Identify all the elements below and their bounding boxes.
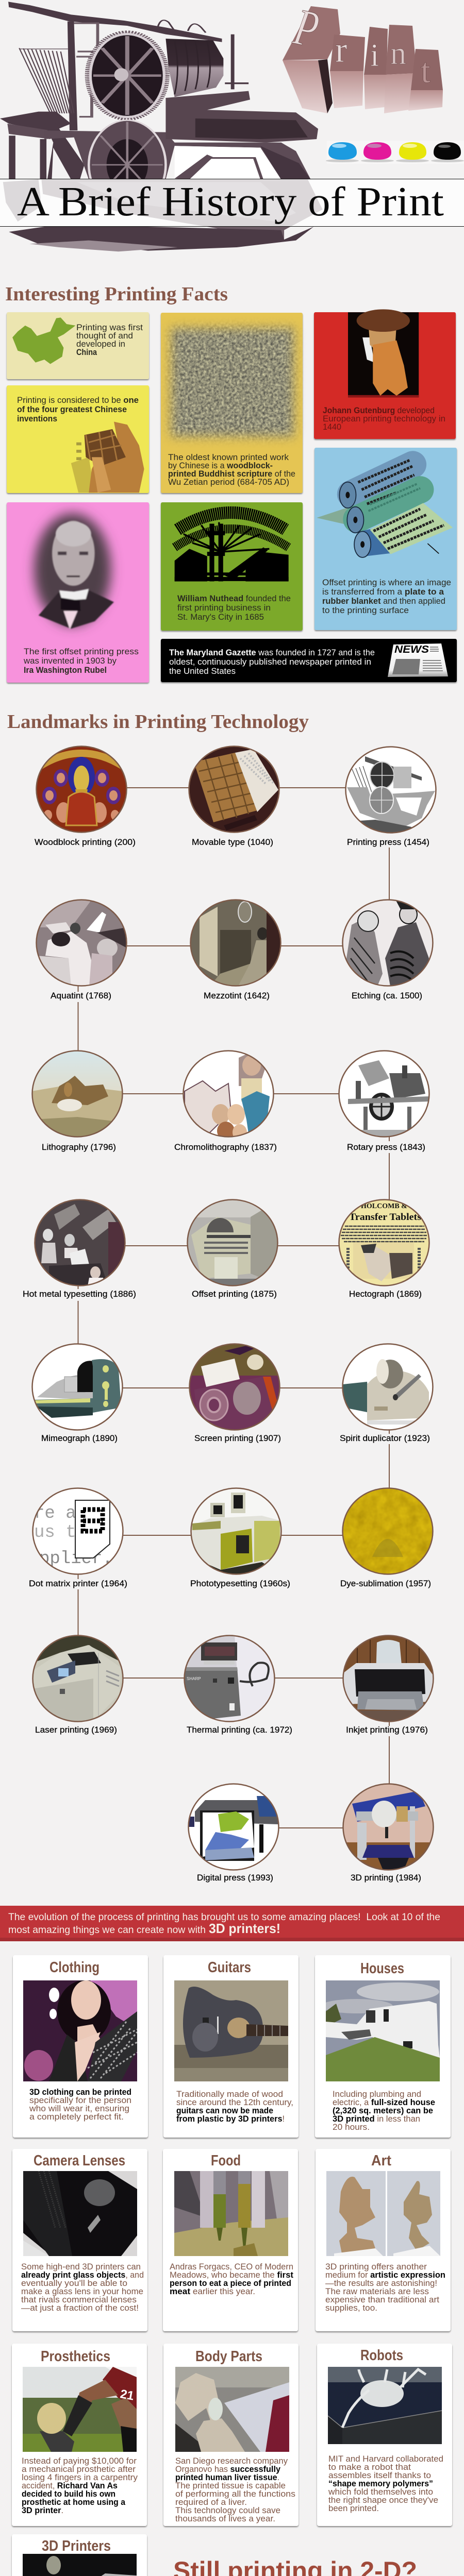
icon: newspaper [388, 643, 448, 677]
panel: Johann Gutenburg [314, 309, 456, 439]
label: Chromolithography (1837) [174, 1142, 277, 1152]
fact text: oldest, continuously published newspaper printed in [169, 657, 371, 667]
card: Guitars [163, 1955, 299, 2138]
image: portrait of Rubel [34, 513, 114, 629]
node: Printing press [345, 747, 436, 847]
node: Aquatint [36, 900, 127, 1001]
label: Etching (ca. 1500) [352, 991, 422, 1001]
node: Dot matrix printer: pplier. [39, 1549, 113, 1569]
label: Dot matrix printer (1964) [29, 1579, 127, 1588]
card text: since around the 12th century, [176, 2097, 293, 2107]
label: Woodblock printing (200) [35, 837, 136, 847]
card text: supplies, too. [325, 2303, 377, 2313]
image: white robot [328, 2367, 442, 2444]
card text: required of a liver. [175, 2497, 247, 2507]
image: PRINT metal type blocks: n [390, 36, 406, 71]
card text: San Diego research company [175, 2456, 288, 2466]
fact text: the United States [169, 666, 236, 676]
image: Buddhist scripture print [171, 328, 294, 437]
card text [325, 2262, 445, 2313]
banner: 3D printers intro [0, 1906, 464, 1941]
node: Spirit duplicator [340, 1344, 433, 1443]
card text: a mechanical prosthetic after [22, 2464, 136, 2474]
card text: eventually you'll be able to [21, 2278, 127, 2288]
card title: Body Parts [195, 2348, 262, 2365]
card text: prosthetic at home using a [22, 2497, 126, 2507]
panel: William Nuthead [161, 502, 303, 631]
node: Mimeograph [32, 1344, 123, 1443]
card text: printed human liver tissue. [175, 2472, 279, 2482]
fact text: to the printing surface [322, 605, 409, 615]
node: Laser printing [32, 1635, 123, 1735]
image: PRINT metal type blocks [283, 0, 443, 113]
card text: medium for artistic expression [325, 2270, 445, 2280]
fact text: Johann Gutenburg developed [323, 405, 435, 415]
card text: assembles itself thanks to [328, 2470, 431, 2480]
card: Robots [317, 2344, 452, 2526]
fact text: thought of and [76, 331, 133, 341]
node: Rotary press [339, 1050, 429, 1152]
card text: been printed. [328, 2503, 379, 2513]
image: printed guitar [174, 1980, 288, 2081]
image: prosthetic leg: 21 [119, 2387, 135, 2403]
fact text: first printing business in [177, 603, 271, 613]
card: Clothing [13, 1955, 148, 2138]
card text: The printed tissue is capable [175, 2481, 286, 2490]
fact text: was invented in 1903 by [23, 656, 117, 666]
card text [21, 2262, 144, 2313]
image: PRINT metal type blocks: r [335, 30, 347, 70]
card: Houses [315, 1955, 451, 2138]
fact text: Ira Washington Rubel [24, 665, 107, 675]
node: Dot matrix printer: us t [34, 1523, 76, 1543]
image: PRINT metal type blocks: i [370, 38, 379, 73]
node: Hectograph [339, 1199, 429, 1299]
node: Etching [342, 900, 433, 1001]
label: Inkjet printing (1976) [346, 1725, 428, 1735]
heading: Interesting Printing Facts: Interesting Printing Facts [5, 283, 228, 305]
label: Phototypesetting (1960s) [190, 1579, 290, 1588]
panel: China fact [7, 312, 149, 379]
card text: electric, a full-sized house [333, 2097, 435, 2107]
card title: Robots [360, 2347, 403, 2364]
label: 3D printing (1984) [351, 1873, 421, 1883]
fact text: by Chinese is a woodblock- [168, 461, 273, 470]
image: printed dress [23, 1980, 137, 2081]
fact text [177, 594, 291, 622]
fact text: China [76, 347, 97, 357]
node: Dot matrix printer [29, 1488, 127, 1588]
fact text [169, 648, 375, 676]
header illustration: printing press [0, 2, 323, 251]
card text: the right shape once they've [328, 2495, 438, 2505]
image: PRINT metal type blocks: t [421, 51, 430, 90]
node: Screen printing [189, 1344, 281, 1443]
card title: 3D Printers [42, 2538, 111, 2554]
node: Offset printing [187, 1199, 278, 1299]
image: RepRap printer [23, 2554, 137, 2576]
label: Mezzotint (1642) [204, 991, 270, 1001]
panel: oldest printed work [161, 313, 303, 493]
label: Aquatint (1768) [51, 991, 111, 1001]
fact text: Printing was first [76, 323, 143, 332]
label: Printing press (1454) [347, 837, 429, 847]
node: Hectograph: HOLCOMB & CO. [361, 1202, 422, 1210]
panel: offset printing [314, 448, 457, 630]
card text: accident, Richard Van As [22, 2481, 118, 2490]
card text: which fold themselves into [328, 2487, 433, 2497]
fact text: European printing technology in [323, 414, 445, 423]
card: Art [316, 2149, 451, 2331]
card text [176, 2089, 293, 2124]
card text: make a glass lens in your home [21, 2286, 143, 2296]
card: Prosthetics [12, 2344, 147, 2526]
card text: Some high-end 3D printers can [21, 2262, 141, 2272]
label: Screen printing (1907) [194, 1433, 281, 1443]
node: 3D printing [343, 1784, 434, 1883]
fact text: Offset printing is where an image [322, 578, 451, 587]
image: gloved hands with tissue [175, 2367, 289, 2452]
title banner [0, 179, 464, 227]
card text: 3D clothing can be printed [29, 2087, 131, 2097]
fact text: of the four greatest Chinese [17, 404, 127, 414]
card text [170, 2262, 293, 2296]
fact text: developed in [76, 339, 125, 349]
icon: newspaper: NEWS [394, 644, 429, 655]
heading: Landmarks in Printing Technology: Landmarks in Printing Technology [7, 711, 309, 733]
card: 3D Printers [12, 2534, 147, 2576]
node: Dot matrix printer: re a [34, 1504, 76, 1523]
card text: meat earlier this year. [170, 2286, 255, 2296]
card text: expensive than traditional art [325, 2295, 439, 2304]
label: Rotary press (1843) [347, 1142, 425, 1152]
node: Dye-sublimation [340, 1488, 433, 1588]
image: printed house [326, 1980, 440, 2081]
fact text [322, 578, 451, 615]
node: Thermal printing [184, 1635, 292, 1735]
image: hand holding type block [71, 421, 144, 493]
fact text: William Nuthead founded the [177, 594, 291, 603]
fact text [76, 323, 143, 357]
card: Camera Lenses [12, 2149, 147, 2331]
label: Lithography (1796) [42, 1142, 116, 1152]
card text: Organovo has successfully [175, 2464, 281, 2474]
node: Chromolithography [174, 1050, 277, 1152]
image: food printer [174, 2171, 288, 2256]
card title: Houses [360, 1960, 404, 1977]
fact text [323, 405, 445, 432]
card text: guitars can now be made [176, 2106, 273, 2115]
label: Dye-sublimation (1957) [340, 1579, 431, 1588]
fact text: The oldest known printed work [168, 452, 289, 462]
card text: MIT and Harvard collaborated [328, 2454, 443, 2464]
label: Hot metal typesetting (1886) [23, 1289, 136, 1299]
card text [22, 2456, 138, 2515]
card text: 20 hours. [333, 2122, 370, 2132]
fact text: Printing is considered to be one [17, 395, 139, 405]
image: printed sculpture [326, 2171, 440, 2256]
image: engraving of a press [175, 513, 289, 581]
card text: 3D printed in less than [333, 2114, 420, 2124]
node: Hectograph: Transfer Tablets [349, 1212, 421, 1223]
card title: Food [211, 2153, 241, 2169]
card text: of performing all the functions [175, 2489, 295, 2499]
card text [175, 2456, 295, 2523]
card text: decided to build his own [22, 2489, 115, 2499]
panel: four greatest inventions [7, 385, 149, 493]
card text [333, 2089, 435, 2132]
fact text: rubber blanket and then applied [322, 596, 445, 606]
card text: a completely perfect fit. [29, 2112, 124, 2122]
label: Laser printing (1969) [35, 1725, 117, 1735]
image: portrait of Gutenburg [348, 309, 419, 397]
card text: —at just a fraction of the cost! [21, 2303, 139, 2313]
card title: Prosthetics [41, 2348, 110, 2365]
node: Movable type [189, 746, 279, 847]
node: Hot metal typesetting [23, 1199, 136, 1299]
banner: 3D printers intro: most amazing things we can create now with [8, 1925, 206, 1936]
card title: Guitars [208, 1959, 251, 1976]
panel: Ira Washington Rubel [7, 502, 149, 683]
card: Food [163, 2149, 298, 2331]
fact text: St. Mary's City in 1685 [177, 612, 264, 622]
card text [328, 2454, 443, 2513]
node: Phototypesetting [190, 1488, 290, 1588]
fact text: printed Buddhist scripture of the [168, 469, 295, 479]
fact text: The first offset printing press [24, 647, 139, 656]
card text: This technology could save [175, 2505, 280, 2515]
card text: Andras Forgacs, CEO of Modern [170, 2262, 293, 2272]
card title: Clothing [49, 1959, 100, 1976]
card text: who will wear it, ensuring [29, 2104, 129, 2113]
label: Spirit duplicator (1923) [340, 1433, 430, 1443]
fact text: inventions [17, 414, 57, 423]
card text: Instead of paying $10,000 for [22, 2456, 137, 2466]
card text: Meadows, who became the first [170, 2270, 293, 2280]
label: Digital press (1993) [197, 1873, 273, 1883]
card title: Camera Lenses [34, 2153, 125, 2169]
card text: thousands of lives a year. [175, 2514, 275, 2523]
card text: (2,320 sq. meters) can be [333, 2106, 433, 2115]
card text: The raw materials are less [325, 2286, 429, 2296]
title: A Brief History of Print [17, 179, 444, 225]
card text: “shape memory polymers” [328, 2479, 433, 2488]
panel: Maryland Gazette [161, 639, 457, 682]
fact text [168, 452, 295, 487]
icon: CMYK ink drops [326, 141, 464, 164]
card: Body Parts [163, 2344, 299, 2526]
card text: 3D printer. [22, 2505, 63, 2515]
card text: losing 4 fingers in a carpentry [22, 2472, 138, 2482]
card text: Traditionally made of wood [176, 2089, 283, 2099]
fact text: The Maryland Gazette was founded in 1727 and is the [169, 648, 375, 657]
label: Offset printing (1875) [192, 1289, 277, 1299]
card text: —the results are astonishing! [325, 2278, 437, 2288]
fact text: Wu Zetian period (684-705 AD) [168, 477, 289, 487]
label: Movable type (1040) [192, 837, 273, 847]
node: Lithography [32, 1050, 123, 1152]
image: prosthetic leg [23, 2367, 137, 2452]
banner: 3D printers intro: 3D printers! [209, 1921, 280, 1936]
fact text: 1440 [323, 422, 341, 432]
banner text: The evolution of the process of printing has brought us to some amazing places! Look at 10 of the [8, 1912, 440, 1923]
fact text [23, 647, 139, 675]
timeline connectors [78, 788, 389, 1828]
node: Woodblock printing [35, 746, 136, 847]
label: Hectograph (1869) [349, 1289, 422, 1299]
card text: 3D printing offers another [325, 2262, 427, 2272]
node: Mezzotint [190, 900, 282, 1001]
card text: from plastic by 3D printers! [176, 2114, 285, 2124]
card text: to make a robot that [328, 2462, 411, 2472]
card title: Art [371, 2153, 391, 2169]
node: Thermal printing: SHARP [187, 1676, 201, 1681]
node: Inkjet printing [343, 1635, 434, 1735]
node: Digital press [188, 1784, 279, 1883]
icon: map of China [12, 317, 75, 364]
image: offset printing rollers [317, 460, 453, 557]
label: Mimeograph (1890) [41, 1433, 118, 1443]
card text: specifically for the person [29, 2095, 131, 2105]
fact text: is transferred from a plate to a [322, 587, 444, 597]
card text: already print glass objects, and [21, 2270, 144, 2280]
card text: Including plumbing and [333, 2089, 421, 2099]
fact text [17, 395, 139, 423]
image: printed lens [23, 2171, 137, 2256]
card text [29, 2087, 131, 2122]
label: Thermal printing (ca. 1972) [187, 1725, 292, 1735]
card text: that rivals commercial lenses [21, 2295, 137, 2304]
card text: person to eat a piece of printed [170, 2278, 291, 2288]
